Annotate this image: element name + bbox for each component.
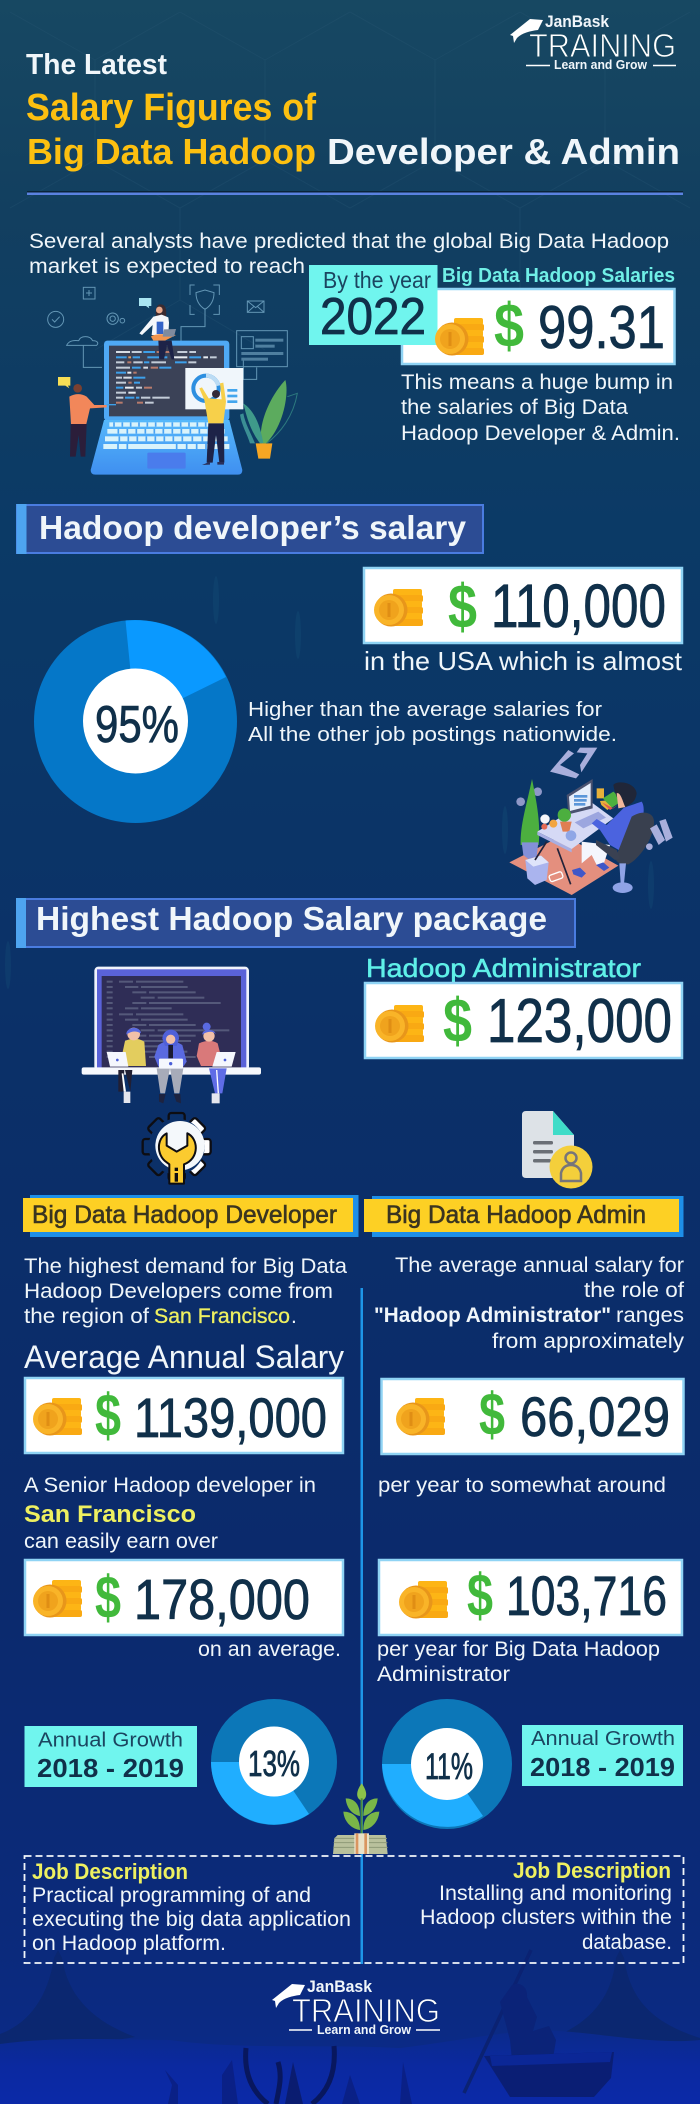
donut chart: 13% [211, 1699, 337, 1825]
text: highest demand [24, 1255, 347, 1328]
badge: annual growth right [522, 1725, 683, 1786]
bump text: Hadoop Developer & Admin. [401, 422, 680, 445]
title divider [27, 191, 683, 195]
text: senior developer: San Francisco [24, 1501, 196, 1528]
job description: developer: Job Description [32, 1859, 188, 1884]
year badge: 2022 [320, 288, 426, 346]
donut chart: 11%: 11% [425, 1746, 473, 1787]
donut chart: 95%: 95% [95, 696, 179, 754]
title: The Latest [26, 49, 167, 81]
year badge: By the year [323, 267, 431, 293]
intro text: market is expected to reach [29, 255, 305, 278]
logo: bottom: Learn and Grow [317, 2023, 411, 2037]
text: in the USA: in the USA which is almost [364, 646, 683, 676]
value card: 110,000: $ [448, 573, 477, 642]
heading: Highest Hadoop Salary package: Highest Hadoop Salary package [36, 900, 547, 937]
heading: Big Data Hadoop Admin: Big Data Hadoop Admin [386, 1201, 646, 1229]
title [26, 49, 680, 172]
value card: 66,029: $ [479, 1381, 505, 1448]
value card: 99.31: 99.31 [538, 294, 665, 361]
logo: bottom: TRAINING [292, 1992, 440, 2029]
bump text: This means a huge bump in [401, 371, 673, 394]
badge: annual growth left: 2018 - 2019 [37, 1753, 184, 1783]
icon: plant on money stack [333, 1783, 388, 1854]
text: senior developer: can easily earn over [24, 1530, 218, 1553]
title: Big Data Hadoop [27, 131, 316, 172]
job description: admin [420, 1858, 672, 1954]
logo: top: JanBask [545, 12, 609, 31]
icon: coins [435, 318, 484, 356]
bottom landscape silhouette [0, 1950, 700, 2104]
icon: gear and wrench [143, 1113, 211, 1184]
intro text [29, 230, 669, 278]
heading: Big Data Hadoop Developer [23, 1195, 358, 1237]
intro text: Several analysts have predicted that the global Big Data Hadoop [29, 230, 669, 253]
bump text [401, 371, 680, 445]
value card: 178,000: $ [95, 1564, 121, 1631]
text: on an average: on an average. [198, 1638, 341, 1661]
text: admin average annual salary [374, 1254, 685, 1353]
icon: document and user [522, 1111, 592, 1188]
value card: 103,716 [379, 1560, 682, 1635]
heading: Hadoop developer's salary: Hadoop developer’s salary [39, 509, 467, 546]
text: admin average annual salary: The average annual salary for [395, 1254, 684, 1277]
text: per year for administrator: Administrator [377, 1663, 510, 1686]
text: admin average annual salary: ranges [616, 1304, 684, 1327]
salaries heading: Big Data Hadoop Salaries [442, 265, 675, 287]
job description dashed panel [24, 1856, 684, 1963]
value card: 178,000: 178,000 [134, 1568, 310, 1632]
bump text: the salaries of Big Data [401, 396, 628, 419]
value card: 110,000 [364, 568, 682, 643]
value card: 123,000 [365, 983, 682, 1058]
value card: 103,716: $ [467, 1562, 493, 1629]
job description: developer [32, 1859, 351, 1955]
value card: 1139,000 [25, 1378, 343, 1453]
label: Hadoop Administrator: Hadoop Administrator [366, 953, 641, 983]
text: highest demand: Hadoop Developers come from [24, 1280, 333, 1303]
value card: 66,029: 66,029 [520, 1385, 670, 1448]
value card: 178,000 [25, 1560, 343, 1635]
job description: admin: database. [582, 1931, 672, 1954]
job description: developer: on Hadoop platform. [32, 1932, 226, 1955]
illustration: three developers on laptop [82, 967, 261, 1103]
badge: annual growth left [24, 1726, 197, 1787]
logo: top [510, 12, 676, 72]
text: higher than average: Higher than the average salaries for [248, 698, 602, 721]
donut chart: 13%: 13% [248, 1743, 300, 1784]
year badge [309, 265, 438, 346]
text: highest demand: San Francisco [154, 1305, 290, 1328]
text: senior developer [24, 1474, 316, 1553]
text: senior developer: A Senior Hadoop developer in [24, 1474, 316, 1497]
job description: admin: Job Description [513, 1858, 671, 1883]
heading: Hadoop developer's salary [16, 504, 483, 554]
label: Average Annual Salary: Average Annual Salary [24, 1339, 344, 1375]
text: per year for administrator: per year for Big Data Hadoop [377, 1638, 660, 1661]
text: highest demand: The highest demand for Big Data [24, 1255, 347, 1278]
value card: 99.31 [402, 289, 674, 364]
badge: annual growth left: Annual Growth [38, 1730, 183, 1752]
logo: top: Learn and Grow [554, 58, 647, 72]
job description: developer: executing the big data application [32, 1908, 351, 1931]
logo: bottom [272, 1977, 440, 2037]
heading: Highest Hadoop Salary package [16, 898, 575, 948]
value card: 99.31: $ [494, 292, 524, 361]
value card: 66,029 [382, 1379, 684, 1454]
logo: top: TRAINING [529, 27, 676, 64]
text: per year to somewhat around: per year to somewhat around [378, 1474, 666, 1497]
heading: Big Data Hadoop Developer: Big Data Hadoop Developer [32, 1201, 337, 1229]
text: admin average annual salary: from approximately [492, 1330, 685, 1353]
job description: developer: Practical programming of and [32, 1884, 311, 1907]
value card: 123,000: $ [443, 987, 472, 1056]
text: higher than average [248, 698, 617, 746]
badge: annual growth right: Annual Growth [531, 1728, 675, 1750]
job description: admin: Installing and monitoring [439, 1882, 672, 1905]
text: admin average annual salary: the role of [584, 1279, 684, 1302]
illustration: laptop team [48, 285, 297, 475]
text: admin average annual salary: "Hadoop Administrator" [374, 1304, 611, 1327]
heading: Big Data Hadoop Admin [364, 1196, 684, 1237]
text: highest demand: . [291, 1305, 297, 1328]
text: highest demand: the region of [24, 1305, 149, 1328]
text: per year for administrator [377, 1638, 660, 1686]
donut chart: 11% [382, 1699, 512, 1829]
value card: 1139,000: 1139,000 [134, 1386, 327, 1449]
title: Developer & Admin [327, 131, 680, 172]
illustration: developer at desk [509, 748, 673, 895]
badge: annual growth right: 2018 - 2019 [530, 1752, 675, 1782]
job description: admin: Hadoop clusters within the [420, 1906, 672, 1929]
title: Salary Figures of [26, 87, 316, 129]
callout: by the year 2022 and salaries [309, 265, 675, 364]
value card: 1139,000: $ [95, 1382, 121, 1449]
center divider line [360, 1288, 363, 1964]
text: higher than average: All the other job postings nationwide. [248, 723, 617, 746]
logo: bottom: JanBask [307, 1977, 373, 1996]
donut chart: 95% [34, 620, 237, 823]
